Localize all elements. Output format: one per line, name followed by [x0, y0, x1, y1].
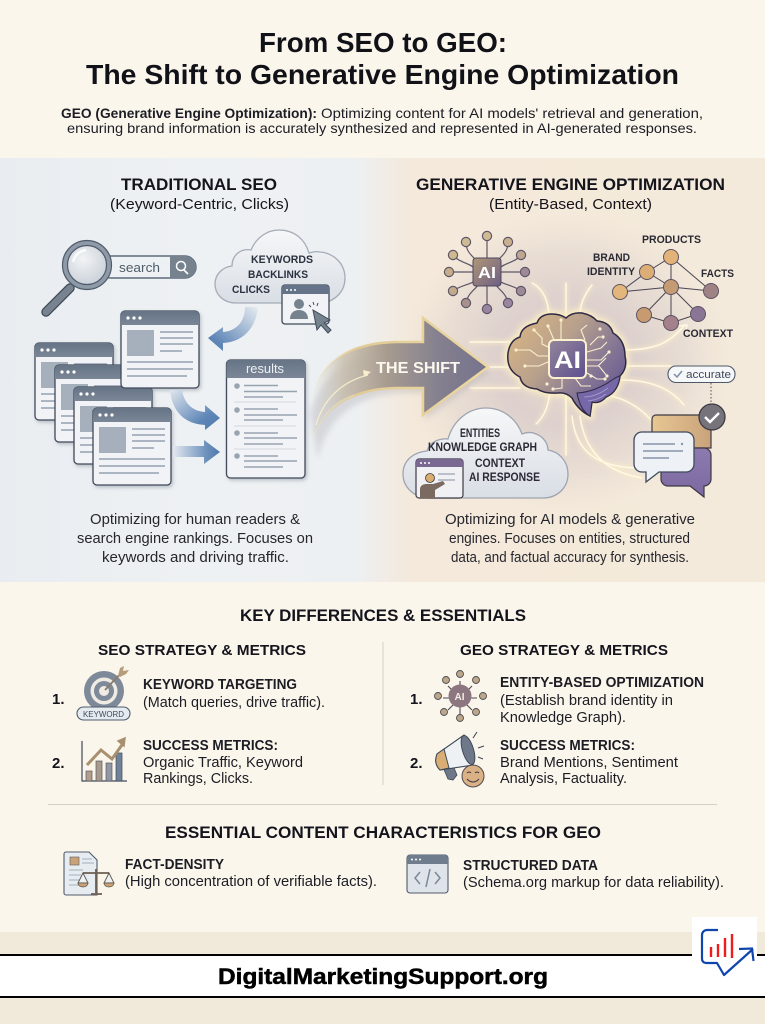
item: GEO success metrics	[410, 732, 678, 787]
description: GEO: Optimizing for AI models & generative	[445, 512, 695, 528]
icon: AI brain	[508, 313, 626, 416]
heading: GEO strategy: GEO STRATEGY & METRICS	[460, 642, 668, 659]
item: SEO success metrics: Organic Traffic, Keyword	[143, 755, 303, 771]
intro definition text: ensuring brand information is accurately synthesized and represented in AI-generated responses.	[67, 120, 697, 136]
icon: entity hub	[434, 670, 486, 722]
arrow: cloud to page	[208, 307, 258, 351]
description: SEO	[77, 512, 313, 566]
knowledge graph: FACTS	[701, 268, 734, 280]
icon: megaphone with smile	[436, 732, 484, 787]
arrow: the shift	[310, 318, 490, 461]
description: SEO: keywords and driving traffic.	[102, 550, 289, 566]
item: SEO success metrics: 2.	[52, 755, 65, 772]
title	[86, 27, 679, 90]
item: GEO success metrics: Brand Mentions, Sentiment	[500, 755, 678, 771]
icon: keywords cloud: BACKLINKS	[248, 269, 308, 281]
item: entity-based optimization: (Establish brand identity in	[500, 693, 673, 709]
item: structured data: (Schema.org markup for data reliability).	[463, 875, 724, 891]
item: keyword targeting	[52, 666, 325, 720]
icon: entities cloud: AI RESPONSE	[469, 472, 540, 484]
description: SEO: search engine rankings. Focuses on	[77, 531, 313, 547]
icon: document and scales	[64, 852, 114, 895]
item: keyword targeting: (Match queries, drive traffic).	[143, 695, 325, 711]
item: structured data: STRUCTURED DATA	[463, 858, 598, 874]
knowledge graph: CONTEXT	[683, 328, 733, 340]
item: GEO success metrics: 2.	[410, 755, 423, 772]
arrow: the shift: THE SHIFT	[376, 360, 461, 377]
intro definition text: GEO (Generative Engine Optimization):	[61, 105, 317, 121]
icon: keywords cloud	[215, 230, 345, 303]
arrow: page to results, curved	[170, 390, 220, 430]
item: GEO success metrics: SUCCESS METRICS:	[500, 738, 635, 754]
icon: chat bubbles with check	[634, 404, 725, 497]
logo	[692, 917, 757, 975]
icon: magnifier and search bar	[46, 240, 196, 312]
item: entity-based optimization: Knowledge Graph).	[500, 710, 626, 726]
arrow: page to results, straight	[173, 440, 220, 464]
knowledge graph: BRAND	[593, 252, 630, 264]
description: GEO	[445, 512, 695, 566]
heading: traditional SEO: TRADITIONAL SEO	[121, 175, 277, 194]
item: fact-density: (High concentration of verifiable facts).	[125, 874, 377, 890]
item: fact-density: FACT-DENSITY	[125, 857, 224, 873]
item: SEO success metrics	[52, 738, 303, 787]
item: keyword targeting: 1.	[52, 691, 65, 708]
item: structured data	[407, 855, 724, 893]
knowledge graph	[587, 234, 734, 340]
item: entity-based optimization	[410, 670, 704, 726]
icon: target	[77, 666, 130, 720]
description: GEO: data, and factual accuracy for synthesis.	[451, 550, 689, 566]
icon: AI chip network	[444, 231, 530, 314]
stacked web pages	[35, 311, 199, 485]
glow behind brain	[401, 212, 731, 512]
item: keyword targeting: KEYWORD TARGETING	[143, 677, 297, 693]
heading: essential characteristics: ESSENTIAL CONTENT CHARACTERISTICS FOR GEO	[165, 824, 601, 842]
icon: code window	[407, 855, 448, 893]
item: fact-density	[64, 852, 377, 895]
panel: generative engine optimization	[310, 158, 765, 582]
icon: growth chart	[82, 738, 127, 781]
intro definition text: Optimizing content for AI models' retrieval and generation,	[321, 105, 703, 121]
item: SEO success metrics: Rankings, Clicks.	[143, 771, 253, 787]
heading: traditional SEO	[110, 175, 289, 213]
title: The Shift to Generative Engine Optimization	[86, 59, 679, 90]
icon: entities cloud: KNOWLEDGE GRAPH	[428, 442, 537, 454]
results list window: results	[246, 362, 284, 376]
description: GEO: engines. Focuses on entities, structured	[449, 531, 690, 547]
item: entity-based optimization: ENTITY-BASED OPTIMIZATION	[500, 675, 704, 691]
icon: magnifier and search bar: search	[119, 260, 160, 275]
heading: GEO	[416, 175, 725, 213]
description: SEO: Optimizing for human readers &	[90, 512, 300, 528]
title: From SEO to GEO:	[259, 27, 507, 58]
icon: target: KEYWORD	[83, 709, 124, 719]
knowledge graph: PRODUCTS	[642, 234, 701, 246]
badge: accurate	[668, 366, 735, 404]
heading: SEO strategy: SEO STRATEGY & METRICS	[98, 642, 306, 659]
light rays from brain	[470, 283, 687, 482]
icon: entities cloud: ENTITIES	[460, 428, 500, 440]
icon: keywords cloud: KEYWORDS	[251, 254, 313, 266]
knowledge graph: IDENTITY	[587, 266, 636, 278]
heading: key differences: KEY DIFFERENCES & ESSENTIALS	[240, 607, 526, 625]
item: SEO success metrics: SUCCESS METRICS:	[143, 738, 278, 754]
intro definition text	[61, 105, 703, 136]
heading: GEO: (Entity-Based, Context)	[489, 196, 652, 213]
footer website text: DigitalMarketingSupport.org	[218, 964, 548, 989]
results list window	[226, 360, 305, 478]
panel: traditional SEO	[0, 158, 383, 582]
icon: entity hub: AI	[454, 692, 465, 703]
icon: browser with user and cursor	[282, 285, 331, 333]
icon: entities cloud: CONTEXT	[475, 458, 525, 470]
item: GEO success metrics: Analysis, Factuality.	[500, 771, 627, 787]
footer band	[0, 932, 765, 1024]
icon: AI brain: AI	[554, 347, 581, 374]
icon: keywords cloud: CLICKS	[232, 284, 270, 296]
badge: accurate: accurate	[686, 369, 731, 381]
icon: AI chip network: AI	[478, 265, 496, 282]
item: entity-based optimization: 1.	[410, 691, 423, 708]
icon: entities cloud	[403, 408, 568, 498]
heading: traditional SEO: (Keyword-Centric, Clicks)	[110, 196, 289, 213]
heading: GEO: GENERATIVE ENGINE OPTIMIZATION	[416, 175, 725, 194]
